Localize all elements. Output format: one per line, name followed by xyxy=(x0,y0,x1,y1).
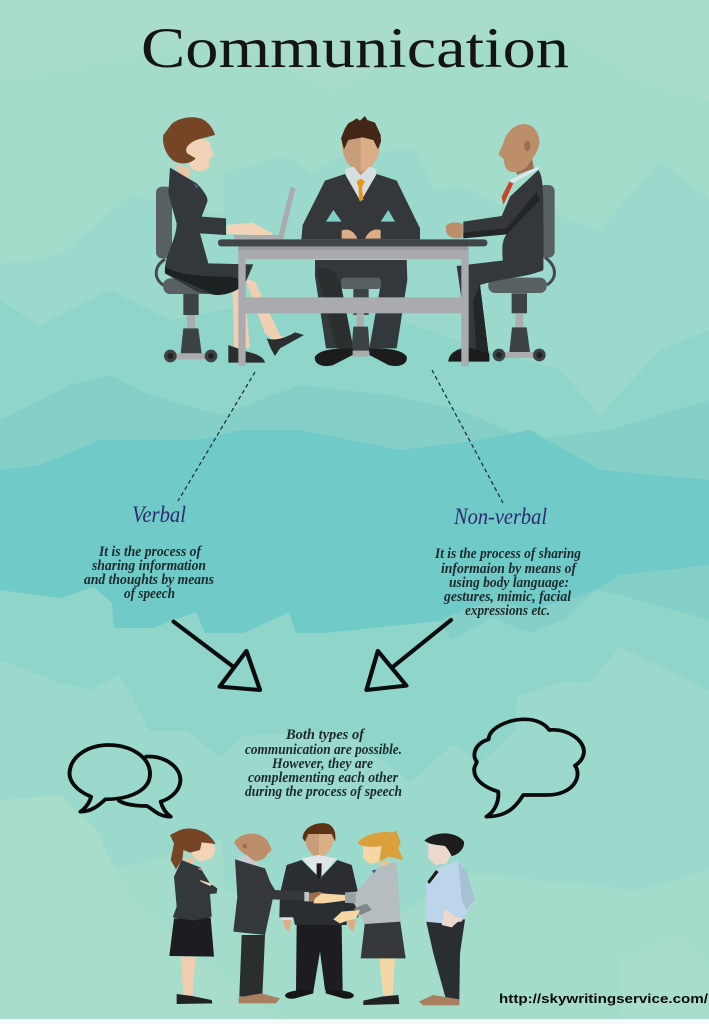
text: both types: communication are possible. xyxy=(245,742,402,758)
dashed line to Non-verbal xyxy=(432,370,503,503)
man in the centre xyxy=(301,116,420,366)
left office chair xyxy=(156,187,222,362)
text: both types: complementing each other xyxy=(248,770,398,786)
text: verbal description: sharing information xyxy=(91,558,206,574)
website url: http://skywritingservice.com/ xyxy=(499,991,708,1006)
dashed line to Verbal xyxy=(178,372,255,501)
illustration: three people at a meeting table xyxy=(156,116,555,366)
bald man on the right xyxy=(446,124,544,362)
icon: cloud speech bubble xyxy=(474,719,584,817)
woman with ponytail xyxy=(169,829,217,1004)
woman at laptop xyxy=(163,117,304,363)
text: verbal description xyxy=(84,544,214,602)
text: verbal description: and thoughts by means xyxy=(84,572,214,588)
man in the centre xyxy=(279,823,358,999)
text: non-verbal description: expressions etc. xyxy=(465,603,550,619)
heading: Verbal: Verbal xyxy=(132,502,186,527)
bald man in suit xyxy=(233,834,326,1003)
text: non-verbal description xyxy=(434,546,581,619)
arrow: from non-verbal to centre xyxy=(366,620,451,690)
laptop xyxy=(234,187,295,239)
text: non-verbal description: It is the process of sharing xyxy=(434,546,581,562)
icon: double speech bubble xyxy=(70,745,180,817)
text: non-verbal description: gestures, mimic, facial xyxy=(443,589,571,605)
text: both types: However, they are xyxy=(271,756,374,772)
text: both types xyxy=(245,727,402,800)
title: Communication xyxy=(141,17,569,80)
meeting table xyxy=(218,239,487,366)
text: non-verbal description: using body language: xyxy=(449,575,569,591)
illustration: five colleagues shaking hands xyxy=(169,823,475,1005)
text: both types: Both types of xyxy=(285,727,366,743)
text: verbal description: of speech xyxy=(124,586,175,602)
text: both types: during the process of speech xyxy=(245,784,402,800)
text: non-verbal description: informaion by means of xyxy=(441,561,578,577)
blonde woman xyxy=(313,831,406,1005)
text: verbal description: It is the process of xyxy=(98,544,203,560)
heading: Non-verbal: Non-verbal xyxy=(453,504,547,529)
arrow: from verbal to centre xyxy=(174,622,260,690)
woman in blue shirt xyxy=(419,833,475,1005)
right office chair xyxy=(488,185,555,361)
